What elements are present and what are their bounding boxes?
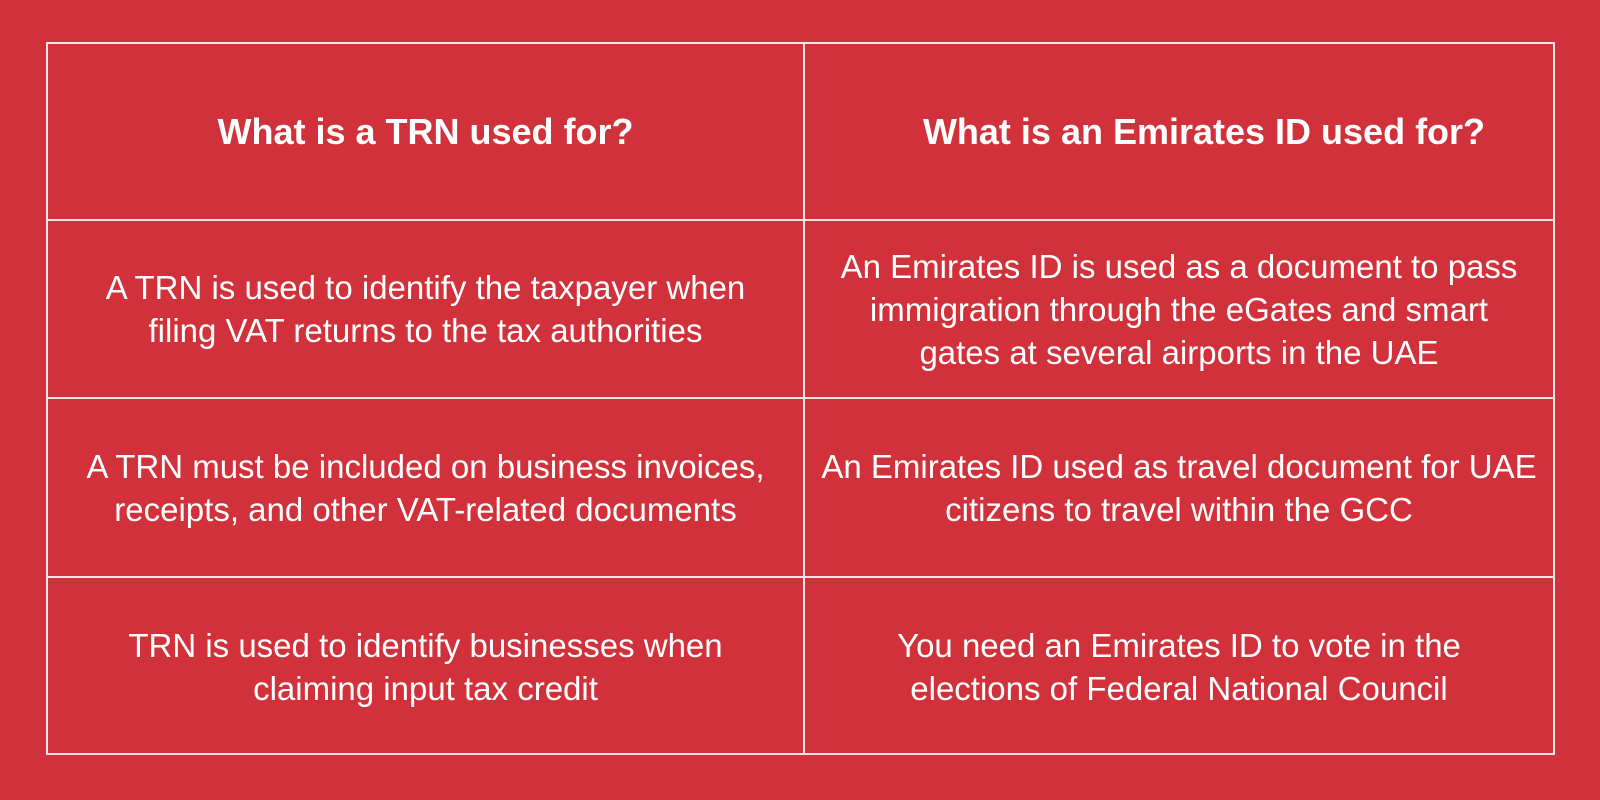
text: TRN row 1: filing VAT returns to the tax authorities — [149, 312, 702, 349]
text: TRN row 1 — [106, 269, 745, 349]
text: EID row 3: You need an Emirates ID to vote in the — [897, 626, 1461, 664]
text: TRN row 1: A TRN is used to identify the taxpayer when — [106, 269, 745, 306]
text: TRN row 3 — [128, 626, 723, 707]
header: Emirates ID: What is an Emirates ID used for? — [923, 111, 1485, 152]
text: EID row 1: gates at several airports in the UAE — [919, 334, 1439, 370]
text: EID row 2: citizens to travel within the GCC — [945, 490, 1413, 528]
text: TRN row 3: TRN is used to identify businesses when — [128, 626, 723, 664]
text: EID row 1: immigration through the eGates and smart — [870, 290, 1488, 328]
header: TRN: What is a TRN used for? — [217, 111, 634, 152]
text: EID row 3: elections of Federal National Council — [910, 670, 1448, 706]
text: EID row 2 — [821, 448, 1537, 528]
text: EID row 1: An Emirates ID is used as a document to pass — [841, 248, 1517, 284]
text: TRN row 2 — [86, 448, 765, 528]
text: TRN row 3: claiming input tax credit — [253, 670, 598, 706]
text: EID row 1 — [840, 248, 1517, 371]
text: TRN row 2: receipts, and other VAT-related documents — [114, 490, 737, 528]
text: TRN row 2: A TRN must be included on business invoices, — [86, 448, 765, 484]
text: EID row 3 — [897, 626, 1461, 706]
text: EID row 2: An Emirates ID used as travel document for UAE — [821, 448, 1537, 484]
